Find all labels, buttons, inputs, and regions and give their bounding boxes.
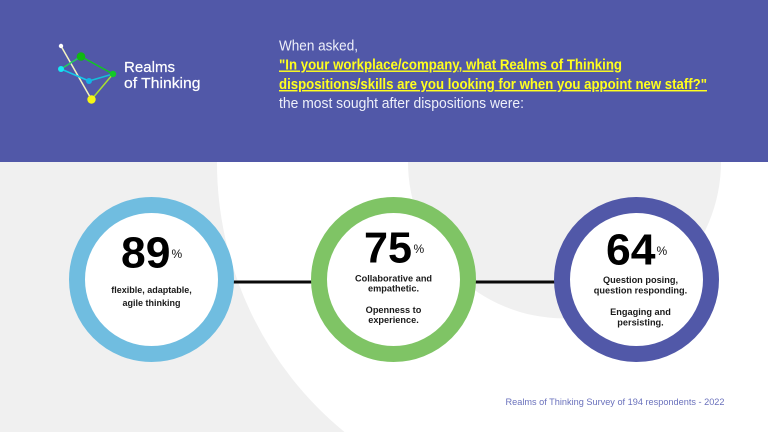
- stat value 89: 89: [121, 230, 170, 278]
- intro question text: dispositions/skills are you looking for when you appoint new staff?": [279, 77, 707, 93]
- description: [355, 274, 432, 325]
- description: Collaborative and: [355, 274, 432, 284]
- stat value 64: 64: [606, 226, 656, 274]
- logo wordmark: Realms: [124, 60, 175, 76]
- stat circle: 75%: [319, 205, 468, 354]
- logo wordmark: of Thinking: [124, 76, 200, 92]
- description: question responding.: [594, 286, 687, 296]
- logo wordmark: [124, 60, 200, 92]
- logo: [58, 44, 200, 104]
- description: agile thinking: [122, 298, 181, 308]
- intro question text: the most sought after dispositions were:: [279, 96, 524, 112]
- description: Engaging and: [610, 307, 671, 317]
- source note: Realms of Thinking Survey of 194 respondents - 2022: [506, 397, 724, 408]
- description: empathetic.: [368, 284, 419, 294]
- percent sign: %: [656, 244, 668, 258]
- stat value 75: 75: [364, 224, 412, 272]
- intro question text: "In your workplace/company, what Realms of Thinking: [279, 58, 622, 74]
- connector line: [230, 280, 560, 284]
- intro question text: When asked,: [279, 38, 358, 54]
- intro question text: [279, 38, 707, 112]
- percent sign: %: [414, 242, 424, 256]
- description: Question posing,: [603, 275, 678, 285]
- stat circle: 64%: [562, 205, 711, 354]
- header banner: [0, 0, 768, 162]
- description: persisting.: [617, 318, 664, 328]
- description: Openness to: [366, 305, 422, 315]
- description: [111, 285, 192, 308]
- icon: realms network: [58, 44, 116, 104]
- stat circle: 89%: [77, 205, 226, 354]
- description: [594, 275, 687, 328]
- description: flexible, adaptable,: [111, 285, 192, 295]
- description: experience.: [368, 315, 419, 325]
- percent sign: %: [172, 247, 182, 261]
